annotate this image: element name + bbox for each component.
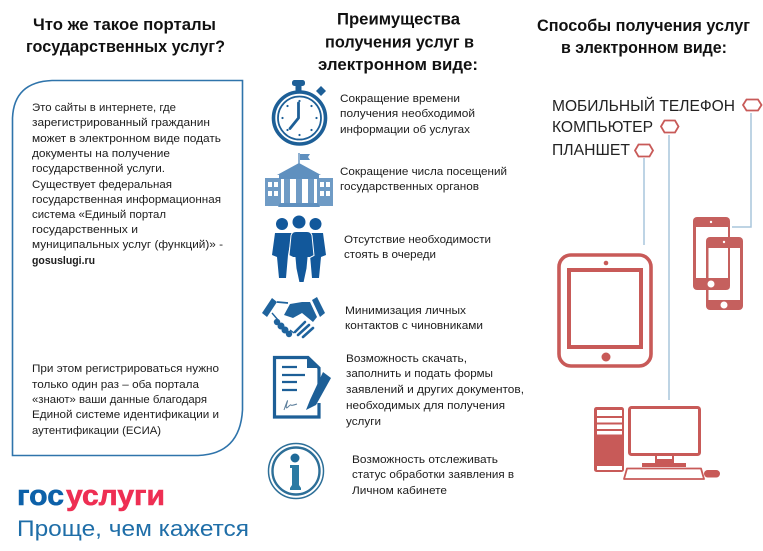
advantage text: forms: Возможность скачать,: [346, 353, 467, 365]
text block: single registration: аутентификации (ЕСИА): [32, 425, 161, 437]
text block: single registration: [32, 363, 219, 437]
text block: single registration: «знают» ваши данные благодаря: [32, 394, 207, 406]
advantage text: visits: государственных органов: [340, 181, 479, 193]
icon: smartphones: [693, 217, 743, 310]
text block: single registration: только один раз – оба портала: [32, 379, 200, 391]
text block: portals definition: Существует федеральная: [32, 179, 172, 191]
heading: advantages: Преимущества: [337, 10, 461, 28]
advantage text: visits: Сокращение числа посещений: [340, 166, 507, 178]
text block: portals definition: может в электронном виде подать: [32, 133, 221, 145]
text block: portals definition: зарегистрированный гражданин: [32, 117, 210, 129]
icon: information: [268, 444, 324, 498]
heading: ways to get services: в электронном виде:: [561, 38, 727, 57]
markers: red hexagons: [635, 100, 762, 156]
labels: device list: [552, 96, 735, 159]
heading: advantages: электронном виде:: [318, 55, 478, 74]
icon: desktop computer: [594, 407, 720, 479]
connector lines: [644, 113, 751, 400]
advantage text: forms: заявлений и других документов,: [346, 384, 524, 396]
advantage text: time: информации об услугах: [340, 124, 470, 136]
heading: ways to get services: Способы получения услуг: [537, 16, 750, 35]
labels: device list: КОМПЬЮТЕР: [552, 119, 653, 136]
logo: gosuslugi: услуги: [66, 480, 165, 512]
text block: single registration: Единой системе идентификации и: [32, 409, 219, 421]
text block: portals definition: государственной услуги.: [32, 163, 165, 175]
logo: gosuslugi: [17, 480, 249, 541]
advantage text: forms: необходимых для получения: [346, 400, 505, 412]
heading: ways to get services: [537, 16, 750, 57]
advantage text: contacts: Минимизация личных: [345, 305, 466, 317]
advantage text: contacts: [345, 305, 483, 332]
advantage text: queues: стоять в очереди: [344, 249, 436, 261]
icon: queue of people: [272, 216, 326, 282]
advantage text: tracking: Возможность отслеживать: [352, 454, 498, 466]
icon: government building: [265, 153, 333, 207]
heading: advantages: [318, 10, 478, 74]
advantage text: forms: услуги: [346, 416, 381, 428]
heading: advantages: получения услуг в: [325, 32, 474, 52]
text block: portals definition: муниципальных услуг (функций)» -: [32, 239, 223, 251]
text block: portals definition: Это сайты в интернете, где: [32, 102, 176, 114]
advantage text: time: получения необходимой: [340, 108, 475, 120]
panel: portal description: [12, 80, 242, 456]
heading: what are the portals: государственных услуг?: [26, 37, 225, 56]
logo: gosuslugi: Проще, чем кажется: [17, 516, 249, 541]
logo: gosuslugi: гос: [17, 480, 64, 512]
text block: portals definition: система «Единый портал: [32, 209, 166, 221]
heading: what are the portals: [26, 15, 225, 56]
advantage text: forms: [346, 353, 524, 428]
labels: device list: ПЛАНШЕТ: [552, 142, 630, 159]
advantage text: visits: [340, 166, 507, 193]
icon: form and pen: [274, 356, 331, 417]
advantage text: tracking: статус обработки заявления в: [352, 469, 514, 481]
advantage text: queues: Отсутствие необходимости: [344, 234, 491, 246]
advantage text: time: [340, 93, 475, 136]
heading: what are the portals: Что же такое порталы: [33, 15, 216, 34]
advantage text: time: Сокращение времени: [340, 93, 460, 105]
advantage text: tracking: [352, 454, 514, 497]
advantage text: tracking: Личном кабинете: [352, 485, 447, 497]
text block: portals definition: документы на получение: [32, 148, 170, 160]
icon: stopwatch: [274, 80, 326, 144]
text block: portals definition: государственная информационная: [32, 194, 221, 206]
text block: portals definition: [32, 102, 223, 267]
text block: single registration: При этом регистрироваться нужно: [32, 363, 219, 375]
advantage text: queues: [344, 234, 491, 261]
labels: device list: МОБИЛЬНЫЙ ТЕЛЕФОН: [552, 96, 735, 115]
advantage text: contacts: контактов с чиновниками: [345, 320, 483, 332]
icon: handshake: [262, 297, 325, 337]
text block: portals definition: государственных и: [32, 224, 138, 236]
icon: tablet: [559, 255, 651, 366]
advantage text: forms: заполнить и подать формы: [346, 368, 493, 380]
text block: portals definition: gosuslugi.ru: [32, 255, 95, 267]
